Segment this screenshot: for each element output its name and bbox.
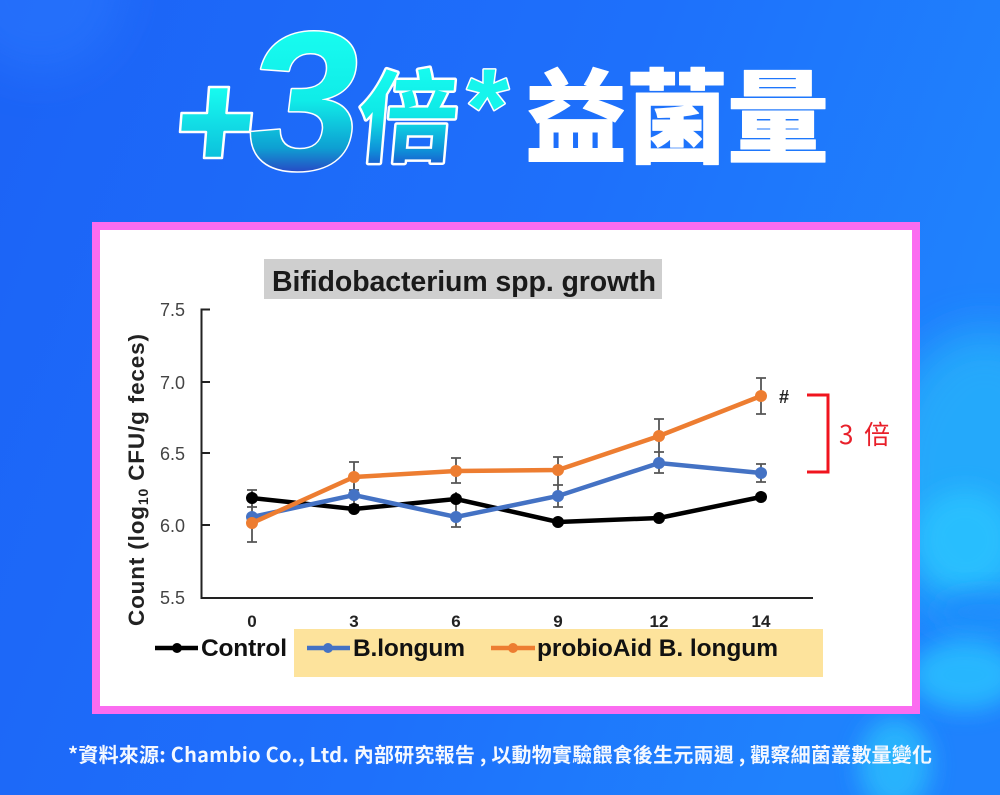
y axis title: CFU/g feces) xyxy=(124,334,149,488)
y axis labels: 5.5 xyxy=(160,588,185,608)
legend xyxy=(155,629,823,677)
title: plus three times, cyan gradient xyxy=(180,0,512,211)
legend: probioAid B. longum: probioAid B. longum xyxy=(537,635,778,662)
x axis labels xyxy=(247,612,771,631)
y axis labels: 7.5 xyxy=(160,300,185,320)
legend: control: Control xyxy=(201,635,287,662)
line: B.longum xyxy=(246,457,767,523)
y axis title: Count (log xyxy=(124,506,149,626)
title: beneficial bacteria count: 益菌量 xyxy=(525,63,829,177)
panel: chart frame xyxy=(96,226,916,710)
y axis labels: 6.0 xyxy=(160,516,185,536)
footnote: *資料來源: Chambio Co., Ltd. 內部研究報告 , 以動物實驗餵食後生元兩週 , 觀察細菌叢數量變化 xyxy=(68,739,932,768)
callout: 3 times: 3 倍 xyxy=(839,415,890,452)
title: plus three times, cyan gradient: * xyxy=(461,46,512,167)
x axis labels: 3 xyxy=(349,612,359,631)
line: control xyxy=(246,491,767,528)
legend: control xyxy=(155,635,287,662)
error bars xyxy=(247,378,766,542)
x axis labels: 0 xyxy=(247,612,257,631)
line: probioAid B. longum xyxy=(246,390,767,529)
y axis labels: 7.0 xyxy=(160,373,185,393)
bracket: 3x difference xyxy=(807,395,828,472)
y axis labels: 6.5 xyxy=(160,444,185,464)
title xyxy=(180,0,829,211)
y axis title: 10 xyxy=(135,488,151,505)
x axis labels: 14 xyxy=(752,612,771,631)
legend: B.longum: B.longum xyxy=(353,635,465,662)
x axis labels: 12 xyxy=(650,612,668,631)
axes xyxy=(201,310,813,598)
significance mark: # xyxy=(779,387,789,407)
chart heading: Bifidobacterium spp. growth xyxy=(272,266,656,298)
x axis labels: 6 xyxy=(451,612,461,631)
title: plus three times, cyan gradient: 倍 xyxy=(353,64,463,176)
x axis labels: 9 xyxy=(553,612,563,631)
y axis labels xyxy=(160,300,185,608)
